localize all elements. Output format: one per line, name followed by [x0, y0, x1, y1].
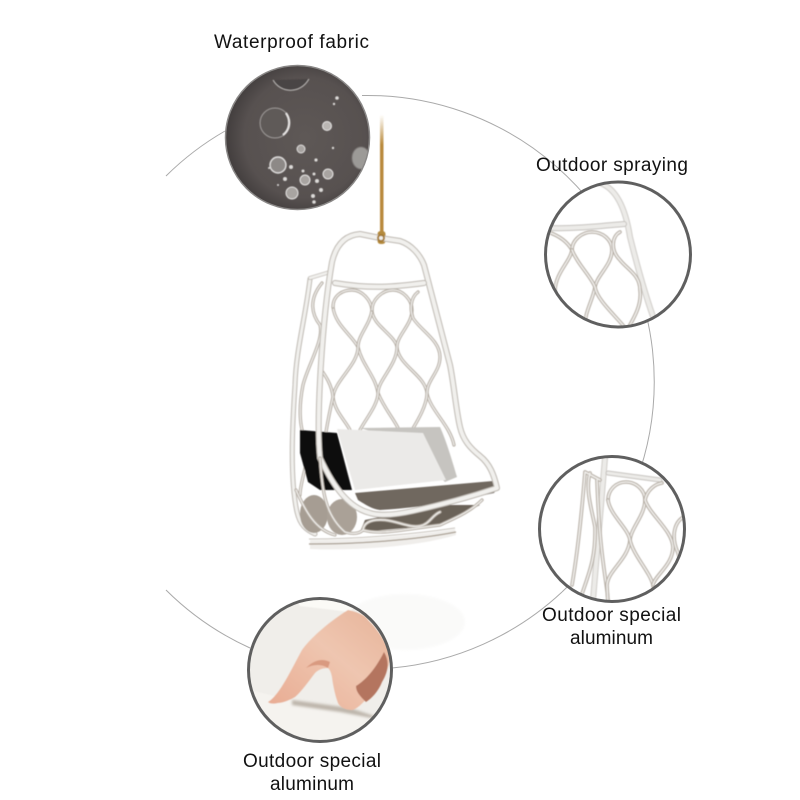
clasp ring [378, 235, 384, 241]
infographic: hanging chair features [166, 34, 692, 790]
connecting circle arcs [166, 95, 654, 668]
small droplets [268, 96, 339, 204]
background shadow under chair [345, 594, 465, 650]
detail circle: waterproof fabric [226, 66, 370, 210]
seat cushion [355, 481, 497, 510]
chair weave pattern [320, 290, 454, 445]
gold hanging rod [378, 115, 386, 244]
horizontal top bar [335, 283, 424, 287]
detail circle: spraying close-up [546, 182, 690, 330]
circular base [309, 528, 456, 549]
main arched frame [319, 234, 497, 515]
hand [268, 610, 389, 710]
water droplets [260, 79, 370, 199]
label: outdoor special aluminum (right) [542, 605, 681, 649]
side frame [292, 272, 330, 534]
detail circle: aluminum frame close-up [540, 456, 686, 605]
white front pillow [337, 429, 446, 490]
label: outdoor special aluminum (bottom): aluminum [270, 774, 354, 795]
label: outdoor special aluminum (bottom): Outdoor special [243, 751, 381, 772]
lower bolster cushions [300, 495, 480, 535]
dark back cushion [300, 430, 352, 490]
hanging chair [292, 115, 497, 549]
grey back pillow [360, 427, 457, 482]
label: outdoor special aluminum (bottom) [243, 751, 381, 795]
lower curved frame loops [296, 458, 482, 535]
label: outdoor special aluminum (right): Outdoor special [542, 605, 681, 626]
label: outdoor spraying: Outdoor spraying [536, 155, 688, 176]
detail circle: hand pressing cushion [248, 598, 395, 745]
label: waterproof fabric: Waterproof fabric [214, 32, 369, 53]
label: outdoor special aluminum (right): aluminum [570, 628, 653, 649]
